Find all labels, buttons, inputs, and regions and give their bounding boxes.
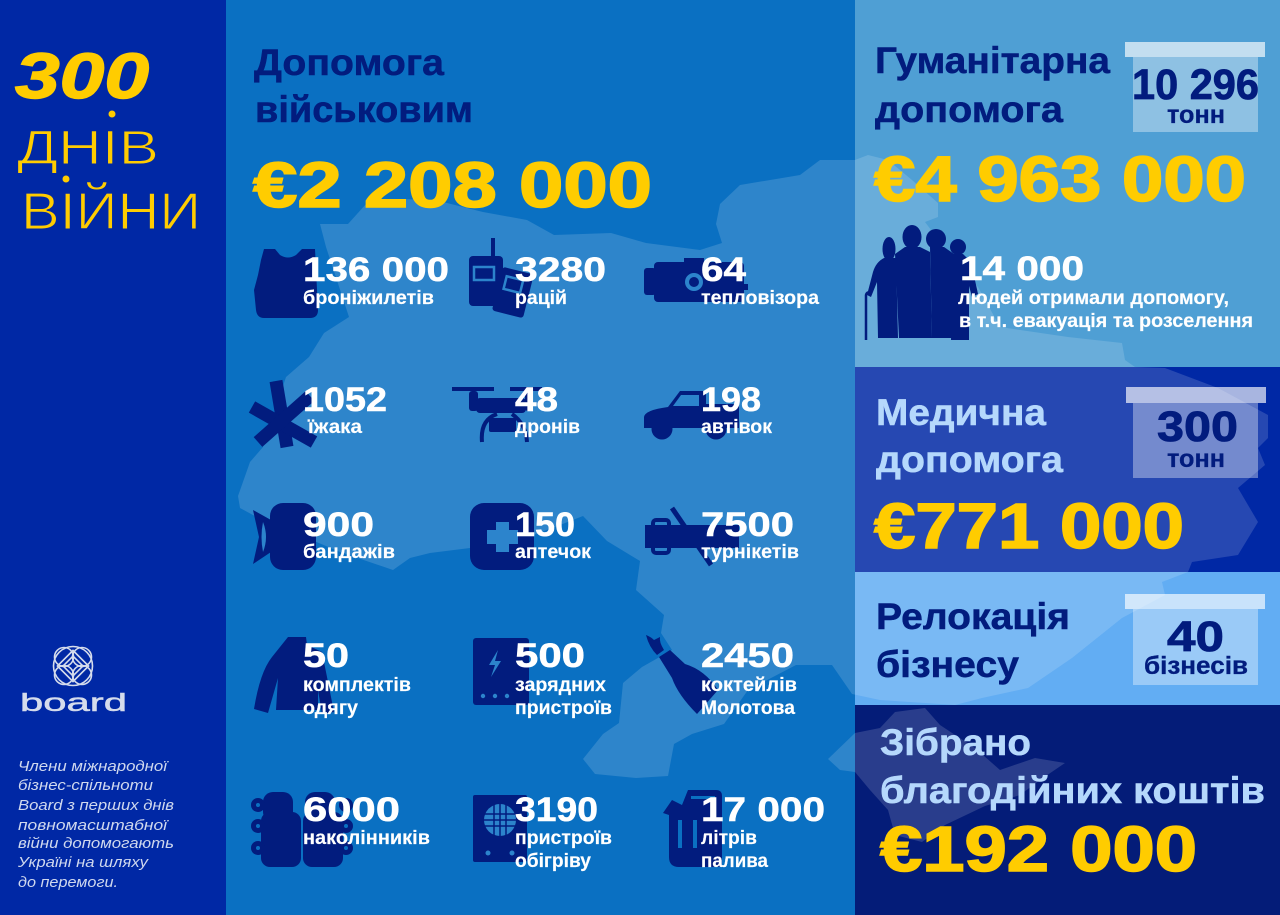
heading: business relocation (876, 596, 1070, 685)
heading: business relocation: Релокація (876, 596, 1070, 637)
box: 40 businesses (1125, 594, 1265, 685)
box: 10 296 tonnes (1125, 42, 1265, 132)
item: Molotov cocktails: 2450 (701, 637, 794, 675)
amount: humanitarian aid: €4 963 000 (874, 143, 1246, 215)
item: tourniquets (645, 506, 799, 565)
item: drones: дронів (515, 417, 580, 438)
item: heaters: пристроїв (515, 828, 612, 849)
title: 300 days of war (15, 40, 201, 241)
item: body armour: броніжилетів (303, 288, 434, 309)
item: thermal imagers: тепловізора (701, 288, 819, 309)
logo: Board (20, 646, 127, 717)
icon: heater (473, 795, 527, 862)
box: 300 tonnes (1126, 387, 1266, 478)
heading: charity funds raised: Зібрано (880, 722, 1031, 763)
item: thermal imagers: 64 (701, 251, 746, 289)
text block: sidebar description: Board з перших днів (18, 798, 174, 814)
panel: charity funds background (855, 705, 1280, 915)
item: clothing sets (254, 637, 411, 719)
stat: people helped: 14 000 (960, 250, 1084, 288)
panel: military aid background (226, 0, 855, 915)
heading: humanitarian aid: Гуманітарна (875, 40, 1110, 81)
heading: aid to the military: Допомога (254, 42, 444, 83)
item: body armour (254, 249, 449, 318)
item: heaters (473, 791, 612, 872)
item: chargers (473, 637, 612, 719)
box: 10 296 tonnes: тонн (1167, 101, 1225, 129)
icon: knot emblem (54, 646, 92, 686)
icon: jerrycan (663, 790, 722, 867)
item: chargers: 500 (515, 637, 585, 675)
item: bandages (253, 503, 395, 570)
heading: humanitarian aid: допомога (875, 89, 1063, 130)
item: pickup trucks: автівок (701, 417, 772, 438)
heading: medical aid: Медична (876, 392, 1046, 433)
item: first aid kits: 150 (515, 506, 575, 544)
box: 300 tonnes: 300 (1157, 403, 1238, 451)
item: anti-tank hedgehogs: 1052 (303, 381, 387, 419)
item: drones (452, 381, 580, 442)
item: heaters: 3190 (515, 791, 598, 829)
icon: thermal camera (644, 258, 748, 302)
text block: sidebar description: Члени міжнародної (18, 759, 169, 775)
stat: people helped: людей отримали допомогу, (958, 288, 1229, 309)
icon: two radios (469, 238, 534, 318)
item: knee pads: наколінників (303, 828, 430, 849)
heading: charity funds raised: благодійних коштів (880, 770, 1265, 811)
item: tourniquets: турнікетів (701, 542, 799, 563)
icon: hedgehog (252, 381, 314, 447)
icon: pickup (644, 391, 739, 440)
item: tourniquets: 7500 (701, 506, 794, 544)
text block: sidebar description: повномасштабної (18, 818, 169, 834)
text block: sidebar description: бізнес-спільноти (18, 778, 153, 794)
icon: vest (254, 249, 318, 318)
icon: Molotov bottle (646, 635, 718, 714)
panel: left sidebar background (0, 0, 226, 915)
box: 40 businesses: 40 (1167, 613, 1224, 661)
item: body armour: 136 000 (303, 251, 449, 289)
amount: military aid: €2 208 000 (253, 149, 652, 221)
item: knee pads: 6000 (303, 791, 400, 829)
item: drones: 48 (515, 381, 558, 419)
box: 10 296 tonnes: 10 296 (1132, 61, 1259, 109)
item: thermal imagers (644, 251, 819, 309)
text block: sidebar description: війни допомогають (18, 836, 174, 852)
box: 300 tonnes: тонн (1167, 445, 1225, 473)
heading: charity funds raised (880, 722, 1265, 811)
title: 300 days of war: ДНІВ (17, 122, 159, 175)
item: Molotov cocktails: Молотова (701, 698, 795, 719)
item: litres of fuel: літрів (701, 828, 757, 849)
item: litres of fuel (663, 790, 825, 872)
item: first aid kits: аптечок (515, 542, 592, 563)
item: pickup trucks: 198 (701, 381, 761, 419)
amount: medical aid: €771 000 (874, 490, 1184, 562)
heading: medical aid: допомога (876, 439, 1063, 480)
title: 300 days of war: ВІЙНИ (21, 182, 201, 241)
amount: charity funds: €192 000 (880, 813, 1197, 885)
text block: sidebar description: Україні на шляху (17, 855, 149, 871)
stat: people helped (866, 225, 1253, 340)
item: first aid kits (470, 503, 592, 570)
heading: aid to the military: військовим (255, 89, 473, 130)
item: radios (469, 238, 606, 318)
item: chargers: пристроїв (515, 698, 612, 719)
panel: medical aid background (855, 367, 1280, 572)
item: litres of fuel: 17 000 (701, 791, 825, 829)
box: 40 businesses: бізнесів (1144, 652, 1248, 680)
heading: aid to the military (254, 42, 473, 130)
item: heaters: обігріву (515, 851, 591, 872)
item: pickup trucks (644, 381, 772, 440)
heading: medical aid (876, 392, 1063, 480)
item: radios: рацій (515, 288, 567, 309)
text block: sidebar description (17, 759, 174, 891)
logo: Board: board (20, 689, 127, 717)
icon: drone (452, 387, 542, 442)
item: knee pads (254, 791, 430, 867)
icon: first aid kit (470, 503, 534, 570)
item: chargers: зарядних (515, 675, 606, 696)
heading: humanitarian aid (875, 40, 1110, 130)
panel: humanitarian aid background (855, 0, 1280, 367)
item: Molotov cocktails (646, 635, 797, 719)
item: radios: 3280 (515, 251, 606, 289)
icon: bandage roll (253, 503, 316, 570)
heading: business relocation: бізнесу (876, 644, 1019, 685)
text block: sidebar description: до перемоги. (18, 875, 118, 891)
icon: jacket (254, 637, 334, 714)
map of Ukraine silhouette (238, 155, 1268, 842)
icon: knee pads (254, 792, 350, 867)
stat: people helped: в т.ч. евакуація та розселення (959, 311, 1253, 332)
item: Molotov cocktails: коктейлів (701, 675, 797, 696)
item: litres of fuel: палива (701, 851, 768, 872)
item: clothing sets: 50 (303, 637, 349, 675)
title: 300 days of war: 300 (15, 40, 149, 112)
item: anti-tank hedgehogs: їжака (307, 417, 362, 438)
icon: power bank (473, 638, 529, 705)
item: clothing sets: комплектів (303, 675, 411, 696)
item: bandages: 900 (303, 506, 374, 544)
icon: group of people (866, 225, 978, 340)
icon: tourniquet (645, 508, 739, 565)
item: anti-tank hedgehogs (252, 381, 387, 447)
panel: business relocation background (855, 572, 1280, 705)
item: bandages: бандажів (303, 542, 395, 563)
item: clothing sets: одягу (303, 698, 358, 719)
